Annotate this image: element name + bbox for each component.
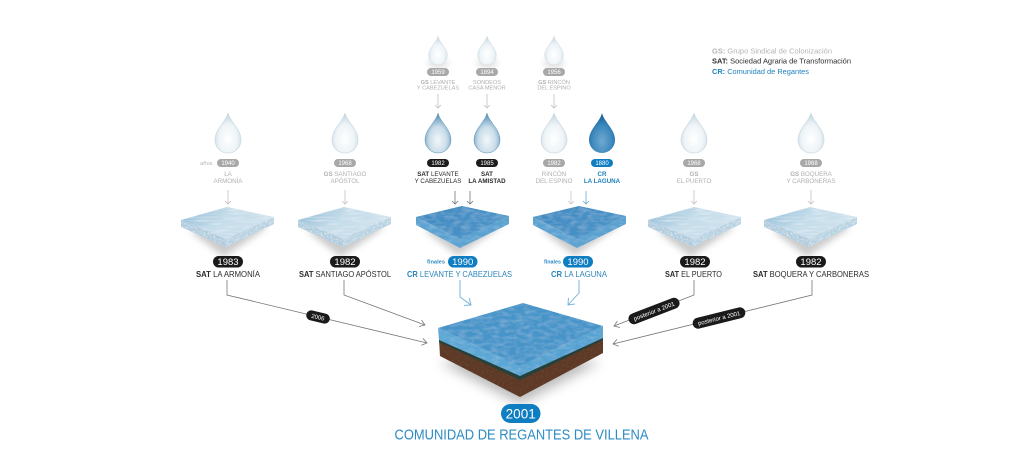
- drop: GS El Puerto 1968: EL PUERTO: [677, 178, 711, 185]
- slab: CR Levante y Cabezuelas: finales: [427, 260, 445, 266]
- slab: CR La Laguna: [533, 206, 626, 279]
- drop: SAT La Amistad 1985: 1985: [480, 161, 494, 167]
- slab: SAT El Puerto: 1982: [684, 257, 706, 268]
- slab: SAT El Puerto: [648, 207, 741, 279]
- drop: SAT Levante y Cabezuelas 1982: SAT LEVANTE: [417, 171, 459, 178]
- main slab: water over soil: [438, 303, 603, 404]
- drop: GS Boquera y Carboneras 1968: [786, 113, 836, 204]
- drop: CR La Laguna 1880: [584, 113, 621, 185]
- drop: La Armonía años 1940: ARMONÍA: [214, 178, 243, 185]
- slab: SAT Boquera y Carboneras: 1982: [800, 257, 822, 268]
- legend: [712, 48, 851, 76]
- slab: SAT La Armonía: SAT LA ARMONÍA: [196, 269, 261, 279]
- drop: Rincón del Espino 1982: [536, 113, 573, 185]
- top drop: GS Rincón del Espino 1956: [537, 36, 571, 108]
- arrows into slab: La Laguna: [568, 191, 589, 204]
- slab: SAT La Armonía: [181, 207, 274, 279]
- drop: SAT Levante y Cabezuelas 1982: 1982: [431, 161, 445, 167]
- drop: La Armonía años 1940: 1940: [221, 161, 235, 167]
- slab: CR La Laguna: CR LA LAGUNA: [551, 270, 608, 279]
- drop: Rincón del Espino 1982: RINCÓN: [542, 171, 566, 178]
- connector: CR La Laguna to Villena: [568, 280, 579, 305]
- drop: La Armonía años 1940: [200, 113, 243, 204]
- connector: La Armonía to Villena, 2006: 2006: [311, 314, 326, 323]
- top drop: Sondeos Casa Menor 1894: [468, 36, 506, 108]
- slab: CR La Laguna: 1990: [567, 257, 589, 268]
- legend: CR: Comunidad de Regantes: [712, 69, 810, 76]
- drop: Rincón del Espino 1982: DEL ESPINO: [536, 178, 573, 185]
- badge: 2001: 2001: [506, 406, 536, 422]
- connector: La Armonía to Villena, 2006: [227, 280, 427, 343]
- connector: CR Levante y Cabezuelas to Villena: [460, 280, 471, 305]
- badge: 2001: [501, 404, 540, 423]
- drop: SAT La Amistad 1985: LA AMISTAD: [468, 178, 506, 185]
- drop: GS El Puerto 1968: GS: [690, 171, 698, 178]
- drop: GS Boquera y Carboneras 1968: Y CARBONERAS: [786, 178, 836, 185]
- slab: CR Levante y Cabezuelas: 1990: [452, 257, 473, 268]
- slab: CR Levante y Cabezuelas: CR LEVANTE Y CABEZUELAS: [407, 270, 512, 279]
- connector: Santiago Apóstol to Villena: [344, 280, 425, 325]
- top drop: GS Rincón del Espino 1956: DEL ESPINO: [537, 86, 571, 92]
- drop: GS El Puerto 1968: [677, 113, 711, 204]
- slab: SAT Santiago Apóstol: [298, 207, 391, 279]
- slab: SAT Santiago Apóstol: 1982: [334, 257, 356, 268]
- drop: SAT La Amistad 1985: SAT: [481, 171, 493, 178]
- connector: Boquera y Carboneras to Villena, posterior a 2001: posterior a 2001: [698, 311, 742, 327]
- slab: CR Levante y Cabezuelas: [407, 206, 512, 279]
- arrows into slab: Levante y Cabezuelas: [452, 191, 473, 204]
- top drop: GS Levante y Cabezuelas 1959: 1959: [431, 70, 445, 76]
- drop: GS El Puerto 1968: 1968: [687, 161, 701, 167]
- slab: SAT Boquera y Carboneras: SAT BOQUERA Y CARBONERAS: [753, 270, 869, 279]
- top drop: Sondeos Casa Menor 1894: CASA MENOR: [468, 86, 506, 92]
- top drop: GS Levante y Cabezuelas 1959: Y CABEZUELAS: [417, 86, 459, 92]
- drop: SAT Levante y Cabezuelas 1982: Y CABEZUELAS: [415, 178, 461, 185]
- title: COMUNIDAD DE REGANTES DE VILLENA: [394, 428, 649, 444]
- drop: SAT Levante y Cabezuelas 1982: [415, 113, 461, 185]
- drop: GS Santiago Apóstol 1968: [324, 113, 367, 204]
- connector: El Puerto to Villena, posterior a 2001: [614, 280, 694, 326]
- top drop: GS Rincón del Espino 1956: GS RINCÓN: [538, 79, 570, 86]
- drop: GS Santiago Apóstol 1968: 1968: [338, 161, 352, 167]
- top drop: GS Levante y Cabezuelas 1959: GS LEVANTE: [421, 80, 456, 86]
- legend: SAT: Sociedad Agraria de Transformación: [712, 58, 851, 66]
- top drop: GS Rincón del Espino 1956: 1956: [547, 70, 561, 76]
- slab: SAT Santiago Apóstol: SAT SANTIAGO APÓSTOL: [299, 269, 391, 279]
- top drop: Sondeos Casa Menor 1894: 1894: [480, 70, 494, 76]
- drop: La Armonía años 1940: LA: [224, 171, 233, 178]
- connector: Boquera y Carboneras to Villena, posterior a 2001: [613, 280, 812, 344]
- slab: SAT La Armonía: 1983: [217, 257, 239, 268]
- top drop: GS Levante y Cabezuelas 1959: [417, 36, 459, 108]
- drop: Rincón del Espino 1982: 1982: [547, 161, 561, 167]
- drop: GS Boquera y Carboneras 1968: 1968: [804, 161, 818, 167]
- legend: GS: Grupo Sindical de Colonización: [712, 48, 832, 56]
- drop: SAT La Amistad 1985: [468, 113, 506, 185]
- slab: SAT Boquera y Carboneras: [753, 207, 869, 279]
- drop: GS Boquera y Carboneras 1968: GS BOQUERA: [790, 171, 833, 178]
- slab: SAT El Puerto: SAT EL PUERTO: [665, 270, 722, 279]
- slab: CR La Laguna: finales: [544, 260, 561, 266]
- drop: CR La Laguna 1880: LA LAGUNA: [584, 178, 621, 185]
- drop: La Armonía años 1940: años: [200, 161, 213, 167]
- drop: CR La Laguna 1880: CR: [598, 171, 607, 178]
- connector: El Puerto to Villena, posterior a 2001: posterior a 2001: [633, 301, 676, 323]
- drop: GS Santiago Apóstol 1968: APÓSTOL: [330, 178, 360, 185]
- top drop: Sondeos Casa Menor 1894: SONDEOS: [473, 80, 501, 86]
- drop: CR La Laguna 1880: 1880: [595, 161, 609, 167]
- drop: GS Santiago Apóstol 1968: GS SANTIAGO: [324, 171, 367, 178]
